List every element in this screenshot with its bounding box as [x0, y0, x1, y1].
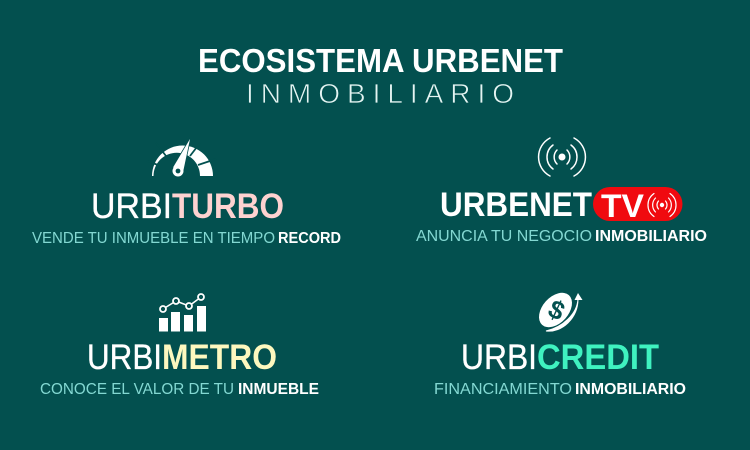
subheading: Inmobiliario: INMOBILIARIO — [246, 78, 514, 109]
icon: growth chart — [159, 294, 206, 332]
tagline: INMOBILIARIO — [595, 228, 707, 245]
wordmark: URBICREDIT — [461, 338, 659, 377]
badge: TV: TV — [601, 188, 645, 224]
wordmark: URBITURBO: URBI — [91, 187, 172, 226]
tagline: RECORD — [278, 230, 341, 247]
tagline: CONOCE EL VALOR DE TU — [40, 381, 234, 398]
panel: UrbiTurbo — [32, 139, 341, 247]
wordmark: URBIMETRO — [87, 338, 277, 377]
wordmark: URBENET: URBENET — [440, 186, 592, 224]
tagline: VENDE TU INMUEBLE EN TIEMPO — [32, 230, 275, 247]
wordmark: URBITURBO — [91, 187, 284, 226]
wordmark: URBIMETRO: URBI — [87, 338, 162, 377]
title — [198, 42, 563, 109]
icon: coin with dollar and arrow — [532, 286, 582, 334]
tagline: ANUNCIA TU NEGOCIO — [416, 228, 592, 245]
panel: UrbiCredit — [434, 286, 686, 398]
wordmark: URBIMETRO: METRO — [162, 338, 277, 377]
tagline — [434, 381, 686, 398]
heading: Ecosistema Urbenet: ECOSISTEMA URBENET — [198, 42, 563, 79]
wordmark: URBICREDIT: URBI — [461, 338, 537, 377]
tagline — [416, 228, 707, 245]
badge: TV — [593, 187, 682, 224]
tagline: INMUEBLE — [238, 381, 319, 398]
icon: broadcast signal — [539, 138, 585, 176]
icon: speedometer — [147, 139, 216, 176]
panel: UrbenetTV — [416, 138, 707, 245]
panel: UrbiMetro — [40, 294, 319, 398]
tagline: INMOBILIARIO — [575, 381, 686, 398]
icon: coin with dollar and arrow: $ — [544, 293, 570, 327]
wordmark: URBITURBO: TURBO — [172, 187, 284, 226]
tagline: FINANCIAMIENTO — [434, 381, 572, 398]
wordmark: URBICREDIT: CREDIT — [537, 338, 659, 377]
